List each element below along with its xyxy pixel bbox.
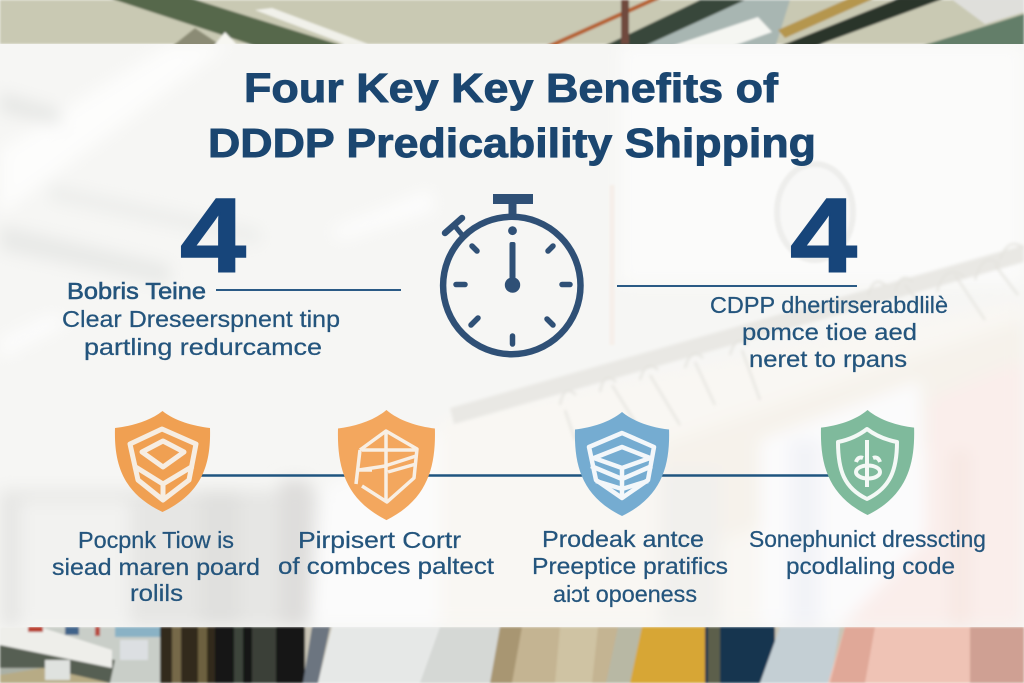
caption 3: aiɔt opoeness <box>553 581 697 607</box>
title: Four Key Key Benefits of <box>244 65 778 111</box>
right callout text: neret to rpans <box>749 346 907 372</box>
caption 3 <box>532 526 728 607</box>
caption 4: pcodlaling code <box>786 553 955 579</box>
connector line: left callout <box>216 289 401 291</box>
icon: stopwatch <box>443 194 580 354</box>
left callout text: partling redurcamce <box>84 334 322 360</box>
connector line: shield row <box>200 474 830 477</box>
icon: orange shield box 2 <box>338 410 435 520</box>
icon: green shield with symbol <box>821 410 914 515</box>
caption 2: Pirpisert Cortr <box>298 527 461 553</box>
caption 3: Preeptice pratifics <box>532 553 728 579</box>
left callout text <box>62 278 340 360</box>
caption 2 <box>278 527 495 579</box>
connector line: right callout <box>617 285 857 287</box>
left big number: 4 <box>180 177 246 295</box>
right callout text <box>710 292 948 372</box>
title: DDDP Predicability Shipping <box>208 120 816 166</box>
caption 3: Prodeak antce <box>542 526 704 552</box>
caption 1: rolils <box>130 580 183 606</box>
caption 1: siead maren poard <box>52 554 260 580</box>
background photo: clothes strip <box>0 627 1024 683</box>
left callout text: Clear Dreseerspnent tinp <box>62 306 340 332</box>
caption 4 <box>749 526 986 579</box>
right callout text: pomce tioe aed <box>742 319 917 345</box>
caption 4: Sonephunict dresscting <box>749 526 986 552</box>
caption 2: of combces paltect <box>278 553 495 579</box>
right callout text: CDPP dhertirserabdlilè <box>710 292 948 318</box>
title <box>208 65 816 166</box>
caption 1: Pocpnk Tiow is <box>78 527 234 553</box>
background photo: ceiling strip <box>0 0 1024 44</box>
right big number: 4 <box>790 177 857 295</box>
caption 1 <box>52 527 260 606</box>
icon: blue shield box <box>575 412 669 516</box>
icon: orange shield box 1 <box>115 411 210 512</box>
left callout text: Bobris Teine <box>67 278 206 304</box>
